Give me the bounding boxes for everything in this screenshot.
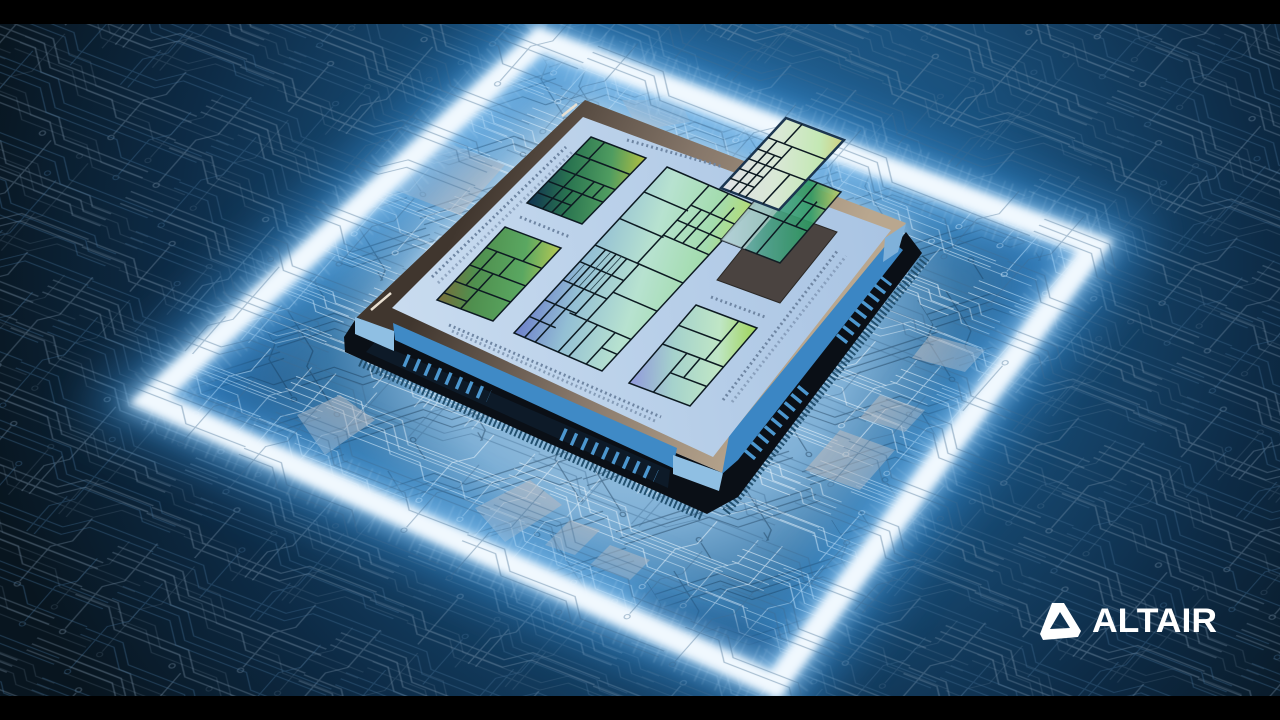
left front blue strip [393,323,677,468]
left front dark slot [366,342,670,488]
frame top surface [357,100,906,473]
green die upper left [527,137,646,224]
light plate [392,117,891,457]
black substrate [344,232,922,514]
floating lower die [721,169,841,263]
dark wedge near bottom corner [636,584,786,662]
corner highlights [371,104,577,310]
pins left front [360,362,702,516]
square interior fill [178,55,1053,656]
blue lead bars right cluster two [841,280,887,340]
logo wordmark: ALTAIR [1092,602,1217,640]
soft glow behind chip [345,95,915,490]
bottom corner block [673,455,723,491]
pale component blocks [297,100,985,580]
green die lower left [437,227,561,321]
blue lead bars front left cluster two [562,434,656,476]
chip package [344,100,926,516]
Altair logo [1040,602,1217,640]
interior traces [190,59,1073,662]
blue lead bars right cluster one [749,388,805,456]
pins right front [726,258,926,512]
right top corner block [883,224,906,262]
left corner block [355,317,394,351]
glowing square frame [150,40,1095,685]
dark die [717,209,837,303]
floating upper die [721,118,844,210]
right blue strip [722,240,903,474]
blue lead bars front left cluster one [405,360,489,396]
mint die lower right [629,305,757,406]
large mint die [514,167,755,371]
logo icon [1040,603,1081,640]
solder dot rows [432,140,846,421]
